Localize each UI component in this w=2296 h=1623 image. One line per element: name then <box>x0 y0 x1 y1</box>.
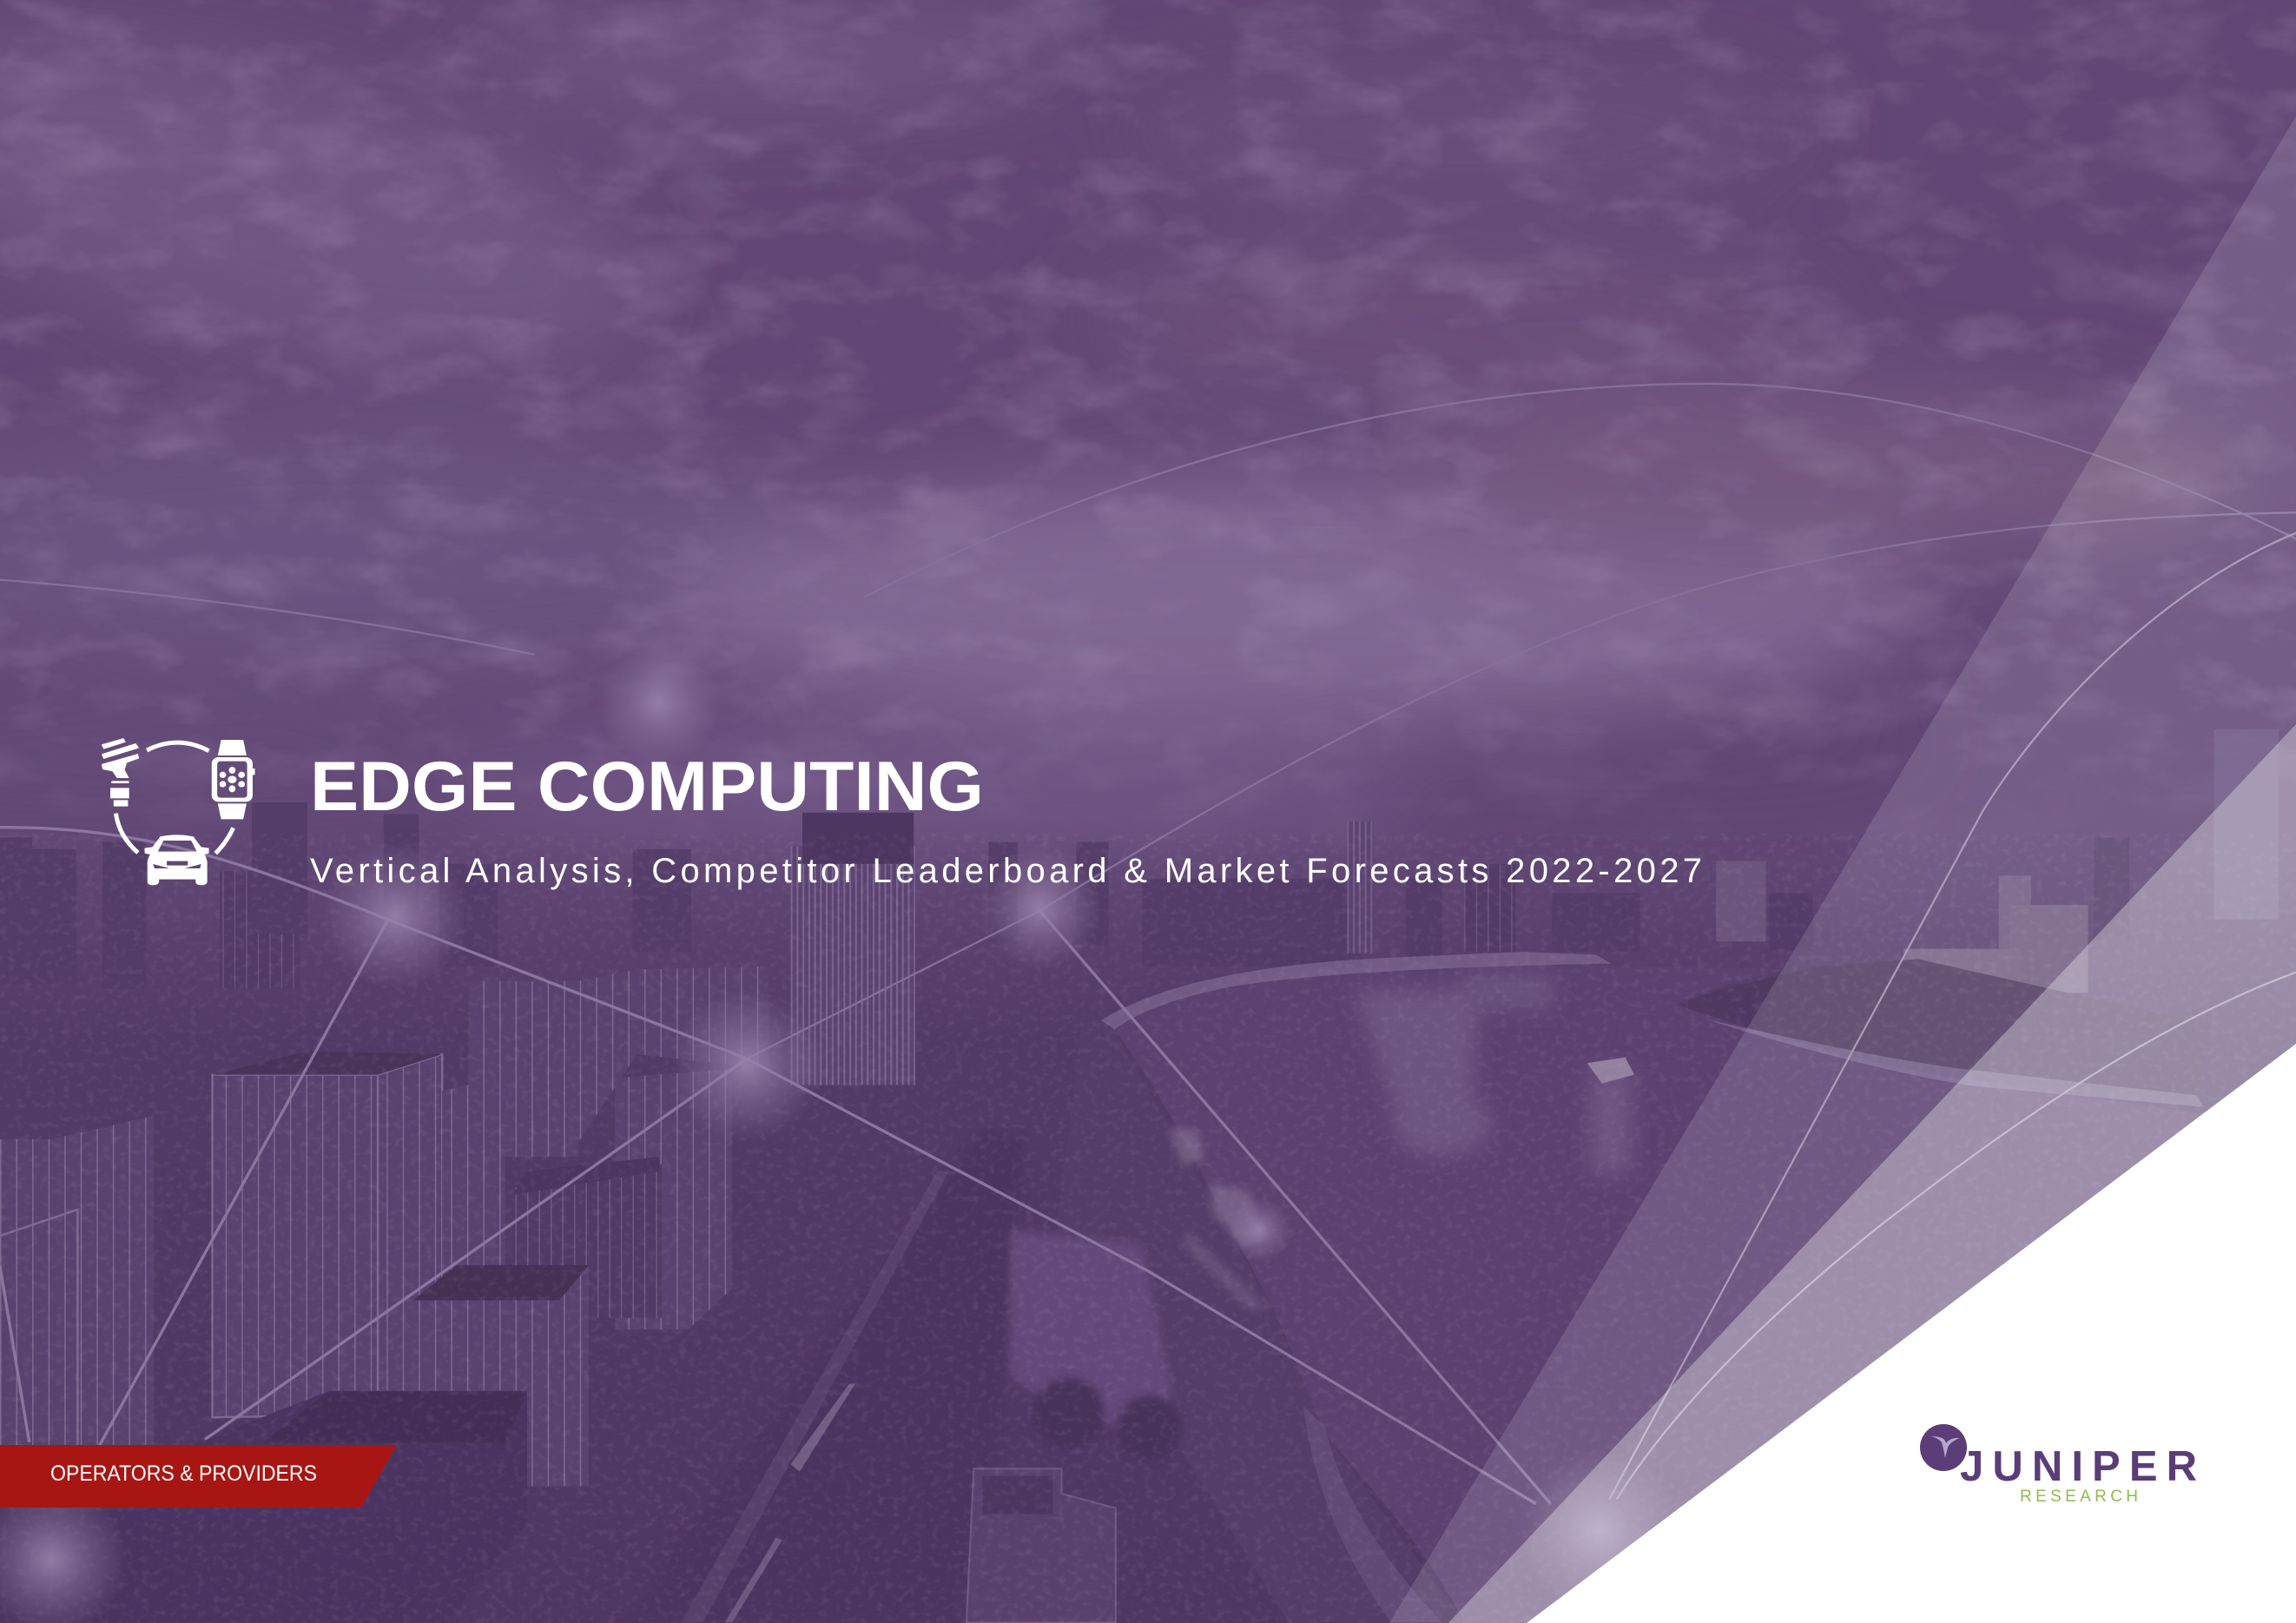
waterfront road <box>1303 1406 1442 1622</box>
logo wordmark: JUNIPER <box>1960 1443 2197 1490</box>
block F <box>442 1076 505 1289</box>
logo: Juniper Research <box>1920 1424 2197 1506</box>
background: purple duotone sky <box>0 0 2296 1023</box>
building block A <box>213 1054 442 1417</box>
west bank land lower right <box>1054 1010 1464 1622</box>
river reflections <box>1355 973 1631 1174</box>
icon: connected bulb, watch and car <box>102 738 255 885</box>
city texture <box>0 834 2296 1623</box>
block H <box>505 1164 662 1318</box>
icon: bulb <box>102 738 139 807</box>
low podium with rooftop lights <box>0 1391 527 1622</box>
white corner triangle <box>1527 1044 2296 1623</box>
road and tree corridor <box>623 1125 1025 1622</box>
far-left foreground buildings <box>0 1116 154 1464</box>
translucent wedge: lower <box>1448 724 2296 1623</box>
logo tagline: RESEARCH <box>2020 1488 2138 1506</box>
river <box>1113 966 2296 1622</box>
tall mid-rise tower <box>791 847 915 1085</box>
river ship <box>1587 1057 1634 1084</box>
background: city skyline and river <box>0 729 2296 1623</box>
translucent wedge: large <box>1389 116 2296 1623</box>
right peninsula <box>1677 959 2211 1101</box>
subtitle: Vertical Analysis, Competitor Leaderboard & Market Forecasts 2022-2027 <box>310 852 1702 890</box>
block G <box>615 1069 732 1329</box>
block I <box>413 1265 589 1487</box>
riverside bank <box>1099 952 1611 1031</box>
icon: car <box>145 835 209 885</box>
ships on west bank <box>1169 1127 1268 1309</box>
network lines and glowing nodes <box>0 384 2296 1623</box>
logo mark <box>1920 1424 1967 1471</box>
category ribbon <box>0 1445 397 1508</box>
title: EDGE COMPUTING <box>310 748 984 826</box>
waterfront plaza <box>1010 1230 1171 1442</box>
skyline towers <box>0 729 2279 993</box>
icon: connecting arcs <box>115 742 234 854</box>
lower building <box>967 1468 1116 1622</box>
ribbon label: OPERATORS & PROVIDERS <box>50 1461 317 1486</box>
block C <box>469 981 578 1157</box>
icon: smartwatch <box>212 740 255 819</box>
ground <box>0 835 2296 1623</box>
